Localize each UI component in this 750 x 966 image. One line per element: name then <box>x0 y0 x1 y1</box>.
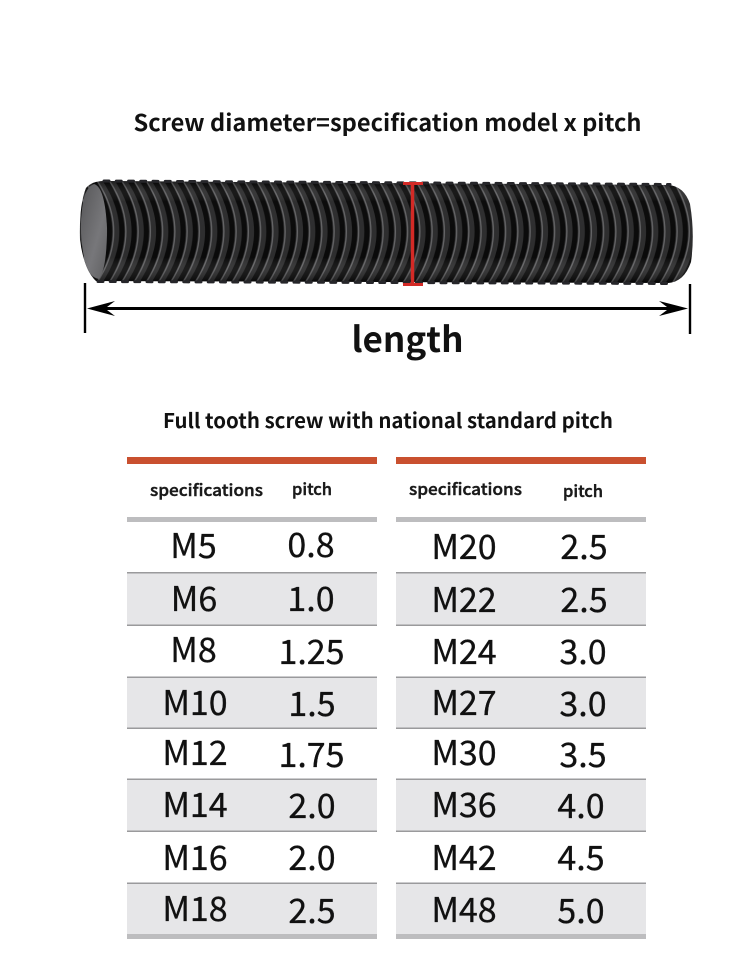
left table values: M6 <box>171 572 217 621</box>
left table values: 2.5 <box>288 884 336 933</box>
title: Screw diameter=specification model x pitch <box>134 104 642 138</box>
thread crests along edges <box>98 181 670 284</box>
length label: length <box>352 312 464 363</box>
left table values: 1.0 <box>287 572 335 621</box>
left table values: M18 <box>162 882 228 931</box>
right table values: M42 <box>431 831 497 880</box>
left table values: 0.8 <box>287 518 335 567</box>
screw body <box>80 181 693 283</box>
right table values <box>431 520 608 933</box>
right table values: M36 <box>431 778 497 827</box>
body shading <box>80 181 693 283</box>
left table header: specifications <box>150 477 263 501</box>
left table values: 1.25 <box>278 625 345 674</box>
left table values: M8 <box>170 623 217 672</box>
left table values: 1.75 <box>278 728 345 777</box>
left table values: M5 <box>170 519 217 568</box>
diameter marker <box>403 184 423 284</box>
threaded screw illustration <box>80 181 693 284</box>
screw end face <box>81 184 107 279</box>
right table values: M30 <box>431 726 497 775</box>
right table values: M20 <box>431 520 497 569</box>
right table row stripes <box>396 573 646 935</box>
table: left <box>127 457 377 939</box>
left table values: 1.5 <box>288 677 336 726</box>
right table header: specifications <box>409 476 522 500</box>
right table header <box>396 457 646 522</box>
right table values: 4.0 <box>557 779 605 828</box>
left table header: pitch <box>292 476 332 500</box>
right table values: 4.5 <box>557 831 605 880</box>
right table header: pitch <box>563 478 603 502</box>
right table values: 3.0 <box>559 625 607 674</box>
right table values: 3.5 <box>559 728 607 777</box>
left table values: 2.0 <box>288 779 336 828</box>
left table values: M12 <box>162 726 228 775</box>
left table values: 2.0 <box>288 831 336 880</box>
left table values: M14 <box>162 778 228 827</box>
right table values: 2.5 <box>560 573 608 622</box>
left table row stripes <box>127 573 377 935</box>
left table header <box>127 457 377 522</box>
right table values: M24 <box>431 625 497 674</box>
left table values: M10 <box>162 676 228 725</box>
table: right <box>396 457 646 939</box>
right table values: M48 <box>431 883 497 932</box>
right table values: 2.5 <box>560 520 608 569</box>
left table values: M16 <box>162 831 228 880</box>
length dimension arrow <box>85 283 690 334</box>
table heading: Full tooth screw with national standard pitch <box>163 404 613 434</box>
right table values: 5.0 <box>557 884 605 933</box>
left table values <box>162 518 345 933</box>
right table values: 3.0 <box>559 677 607 726</box>
right table values: M22 <box>431 573 497 622</box>
right table values: M27 <box>431 676 497 725</box>
